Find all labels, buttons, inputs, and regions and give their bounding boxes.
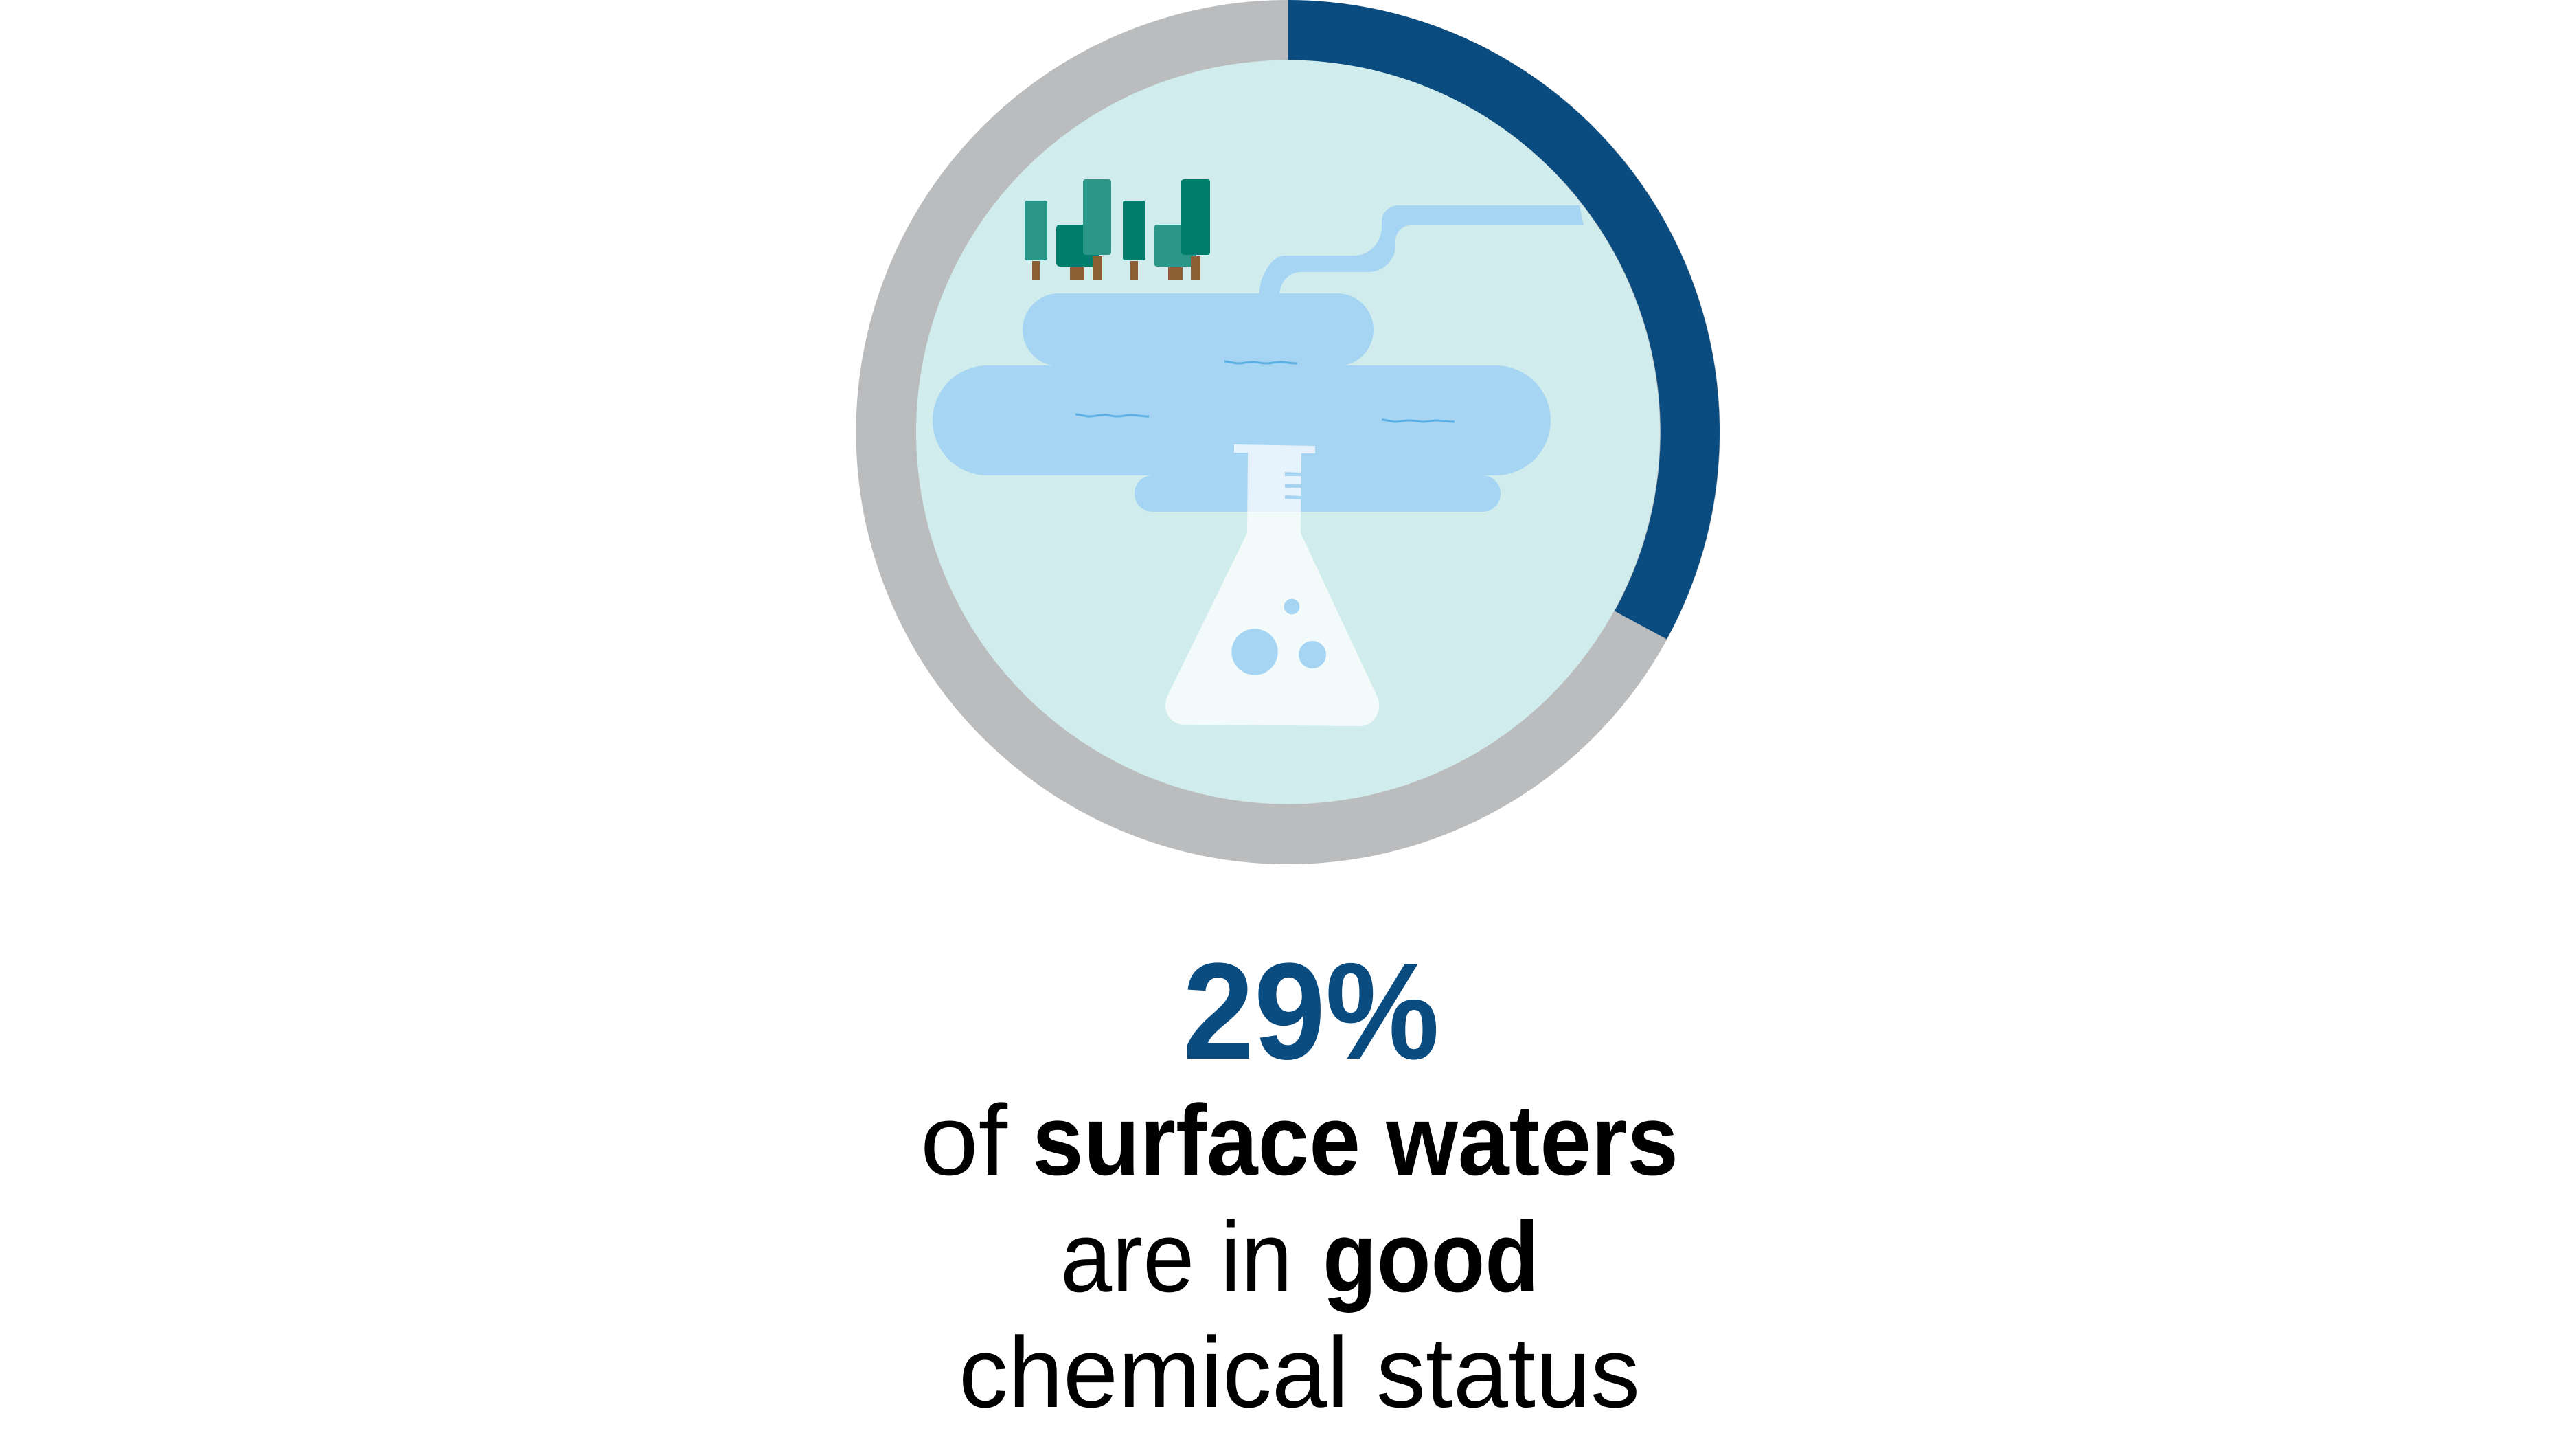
ripple 3 <box>1382 420 1455 422</box>
upper lake <box>1023 293 1374 366</box>
icon: laboratory flask <box>1165 444 1379 726</box>
icon: river pipe <box>1259 205 1584 294</box>
donut chart: 29% progress ring <box>886 0 1720 834</box>
tree 3 <box>1083 179 1111 280</box>
text line: of surface waters: surface waters <box>1032 1084 1678 1196</box>
tree 6 <box>1181 179 1210 280</box>
icon: water bodies <box>933 293 1551 512</box>
flask scale ticks <box>1285 472 1301 499</box>
water ripples <box>1075 361 1455 422</box>
headline statistic: 29%: 29% <box>1183 935 1439 1088</box>
ring track <box>886 30 1689 834</box>
text line: are in good: are in <box>1060 1201 1292 1313</box>
text line: of surface waters: of <box>920 1084 1007 1196</box>
ripple 1 <box>1224 361 1297 363</box>
text line: chemical status: chemical status <box>959 1316 1640 1428</box>
lower lake <box>1135 475 1501 512</box>
inner circle background <box>916 60 1660 804</box>
text line: are in good <box>1060 1201 1539 1313</box>
tree 5 <box>1154 225 1196 280</box>
middle lake <box>933 365 1551 475</box>
flask body <box>1165 444 1379 726</box>
tree 4 <box>1123 201 1145 280</box>
tree 1 <box>1025 201 1047 280</box>
flask bubbles <box>1231 599 1326 675</box>
ring value segment <box>1288 0 1720 639</box>
text line: are in good: good <box>1323 1201 1539 1313</box>
tree 2 <box>1056 225 1099 280</box>
icon: trees <box>1025 179 1210 280</box>
ripple 2 <box>1075 414 1149 416</box>
